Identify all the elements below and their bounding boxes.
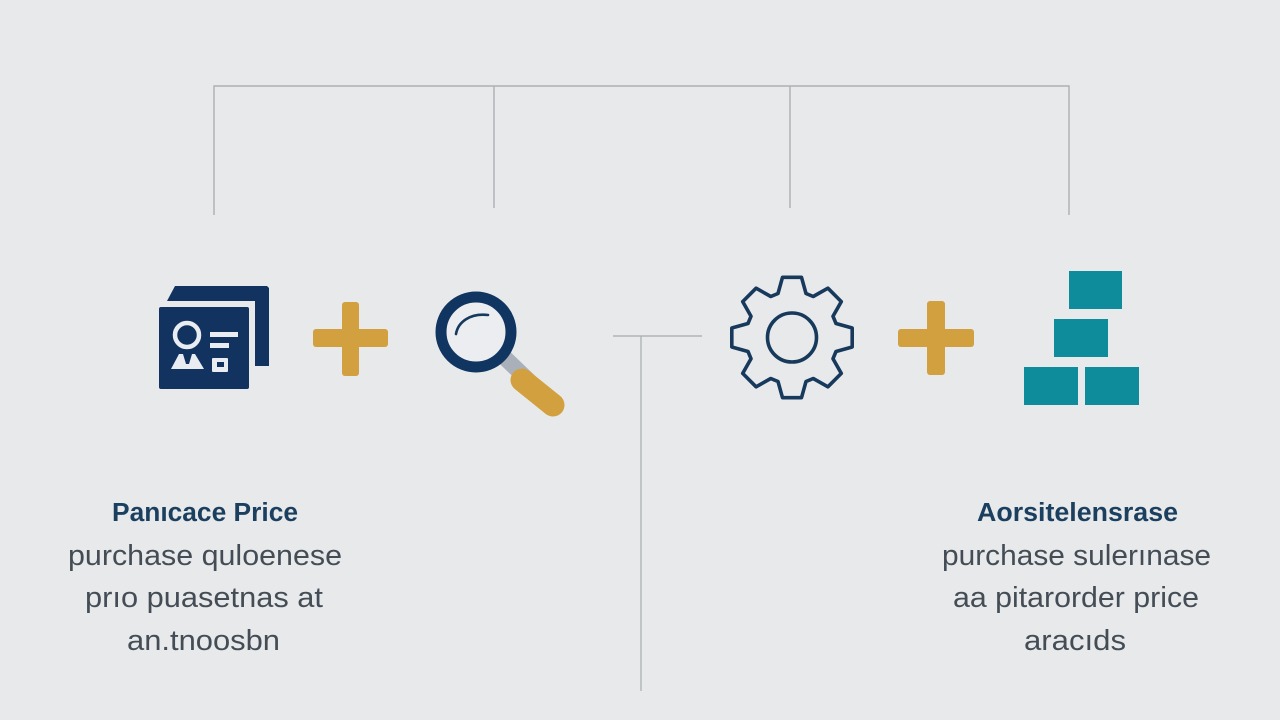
text block: right — [942, 499, 1211, 657]
icon: magnifying glass — [441, 297, 553, 405]
icon: ID cards — [159, 286, 269, 389]
top bracket connector — [214, 86, 1069, 215]
heading: right: Aorsitelensrase — [977, 499, 1178, 527]
centre T connector — [613, 336, 702, 691]
body text: right — [942, 540, 1211, 657]
heading: left: Panıcace Price — [112, 499, 298, 527]
body text: left: an.tnoosbn — [127, 625, 280, 657]
body text: left — [68, 540, 342, 657]
body text: left: purchase quloenese — [68, 540, 342, 572]
icon: right plus sign — [898, 301, 974, 375]
icon: left plus sign — [313, 302, 388, 376]
icon: gear — [732, 277, 852, 398]
body text: right: aa pitarorder price — [953, 582, 1199, 614]
body text: right: aracıds — [1024, 625, 1126, 657]
body text: right: purchase sulerınase — [942, 540, 1211, 572]
body text: left: prıo puasetnas at — [85, 582, 323, 614]
icon: stacked blocks — [1024, 271, 1139, 405]
text block: left — [68, 499, 342, 657]
